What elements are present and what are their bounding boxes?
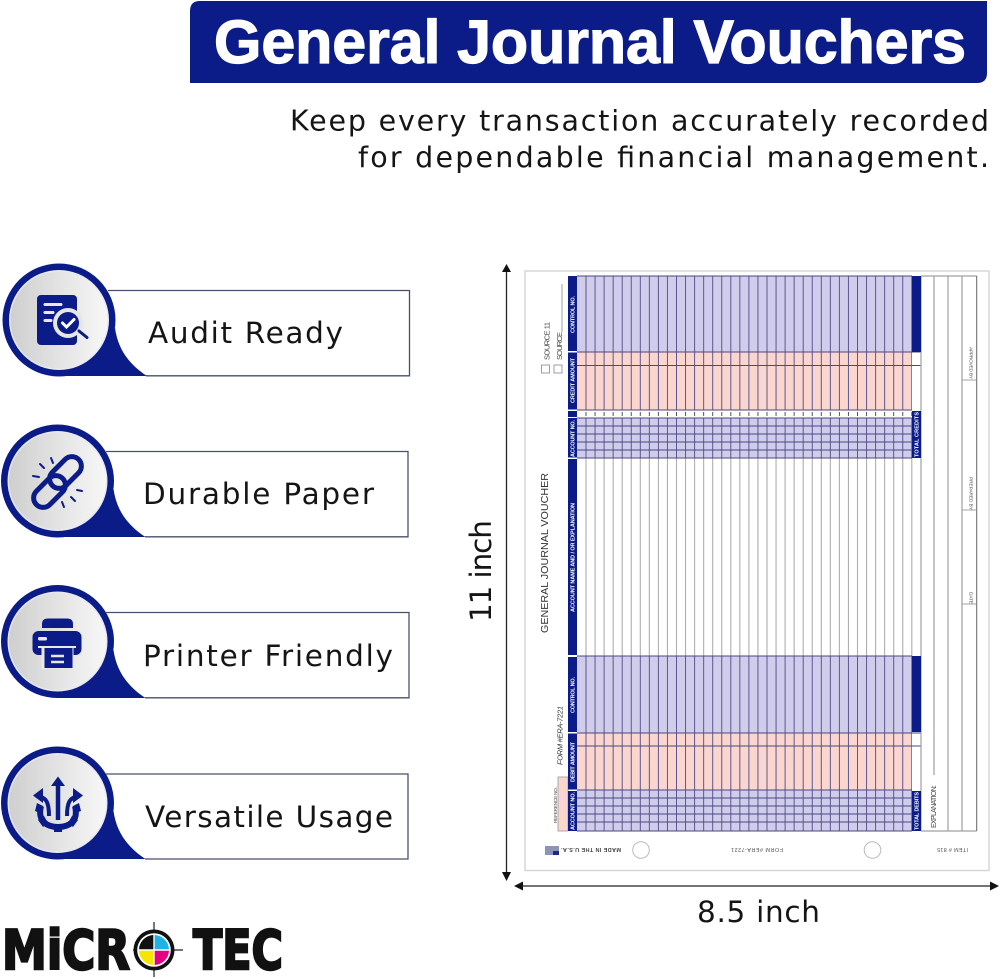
form: strip headings: [570, 296, 920, 830]
form: source checkboxes: SOURCE: [555, 332, 564, 360]
form: footer: FORM #ERA-7221: [731, 846, 783, 852]
label: Audit Ready: [148, 316, 343, 350]
dimension arrow: width: [514, 882, 999, 890]
form: colour bands: [558, 276, 912, 831]
title banner: General Journal Vouchers: [214, 8, 966, 76]
badge: [2, 264, 147, 376]
icon: branching arrows and gear: [33, 776, 83, 832]
feature: Printer Friendly: [1, 585, 409, 698]
dimension arrow: height: [502, 264, 511, 881]
subtitle: [290, 104, 989, 174]
badge: [1, 424, 146, 538]
logo: Micro Tec: [2, 919, 283, 979]
subtitle: for dependable financial management.: [358, 141, 989, 174]
form: strip headings: CREDIT AMOUNT: [570, 357, 576, 403]
form: strip headings: CONTROL NO.: [570, 677, 576, 713]
form: title: GENERAL JOURNAL VOUCHER: [539, 473, 551, 633]
icon: audit document with magnifier: [37, 295, 87, 345]
form: number: FORM #ERA-7221: [556, 706, 564, 765]
form: footer: MADE IN THE U.S.A.: [561, 846, 621, 852]
form: grid lines: [562, 270, 977, 835]
form: strip headings: TOTAL DEBITS: [914, 792, 920, 830]
badge: [1, 746, 146, 860]
feature: Versatile Usage: [1, 746, 408, 860]
label: Printer Friendly: [143, 639, 393, 673]
form: strip headings: DEBIT AMOUNT: [570, 741, 576, 782]
form: signature labels: APPROVED BY: [968, 347, 974, 380]
label: Versatile Usage: [145, 800, 393, 834]
form: explanation label: EXPLANATION:: [931, 785, 938, 828]
form: signature labels: DATE: [968, 592, 974, 604]
feature: Durable Paper: [1, 424, 408, 538]
form: strip headings: CONTROL NO.: [570, 296, 576, 333]
dimension label: 11 inch: 11 inch: [464, 520, 498, 622]
form: source checkboxes: SOURCE 11: [542, 322, 552, 360]
icon: chain link: [30, 453, 85, 511]
form: strip headings: ACCOUNT NAME AND / OR EXPLANATION: [570, 503, 576, 612]
badge: [1, 585, 146, 698]
form: footer: ITEM # 815: [937, 846, 968, 852]
form: reference label: REFERENCE NO.: [553, 787, 559, 823]
form: source checkboxes: [542, 322, 564, 373]
label: Durable Paper: [143, 477, 375, 511]
voucher form: [525, 270, 989, 870]
form: strip headings: ACCOUNT NO.: [570, 792, 576, 830]
icon: printer: [32, 618, 82, 669]
subtitle: Keep every transaction accurately recorded: [290, 104, 989, 138]
form: signature labels: [968, 347, 974, 604]
form: footer: [545, 842, 968, 858]
dimension label: 8.5 inch: 8.5 inch: [697, 895, 820, 929]
feature: Audit Ready: [2, 264, 410, 376]
form: navy strips: [568, 276, 921, 831]
form: strip headings: ACCOUNT NO.: [570, 420, 576, 457]
form: strip headings: TOTAL CREDITS: [914, 412, 920, 457]
form: signature labels: PREPARED BY: [968, 477, 974, 511]
